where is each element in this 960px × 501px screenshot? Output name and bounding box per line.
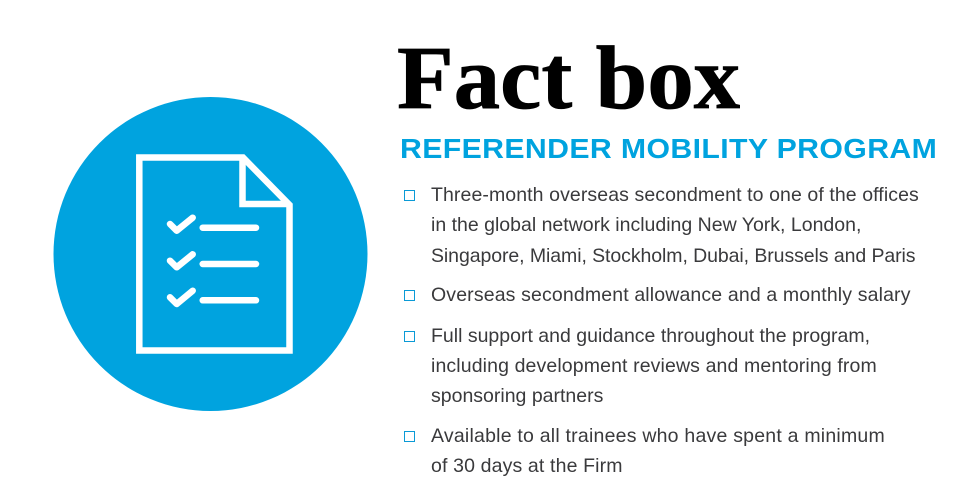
bullet 3 (404, 324, 877, 407)
bullet 1: Singapore, Miami, Stockholm, Dubai, Brussels and Paris (431, 244, 915, 266)
title: Fact box (397, 29, 740, 128)
bullet 2: Overseas secondment allowance and a monthly salary (431, 284, 911, 306)
bullet 3: Full support and guidance throughout the program, (431, 324, 870, 346)
subtitle: REFERENDER MOBILITY PROGRAM (400, 133, 937, 164)
bullet 4: Available to all trainees who have spent a minimum (431, 425, 885, 447)
bullet 1: in the global network including New York, London, (431, 214, 861, 236)
bullet 4: of 30 days at the Firm (431, 455, 623, 477)
bullet 4 (404, 425, 885, 477)
icon: document in blue circle (54, 97, 368, 411)
bullet 3: including development reviews and mentoring from (431, 355, 877, 377)
bullet 3: sponsoring partners (431, 385, 603, 407)
bullet 1 (404, 184, 919, 266)
bullet 1: Three-month overseas secondment to one of the offices (431, 184, 919, 206)
